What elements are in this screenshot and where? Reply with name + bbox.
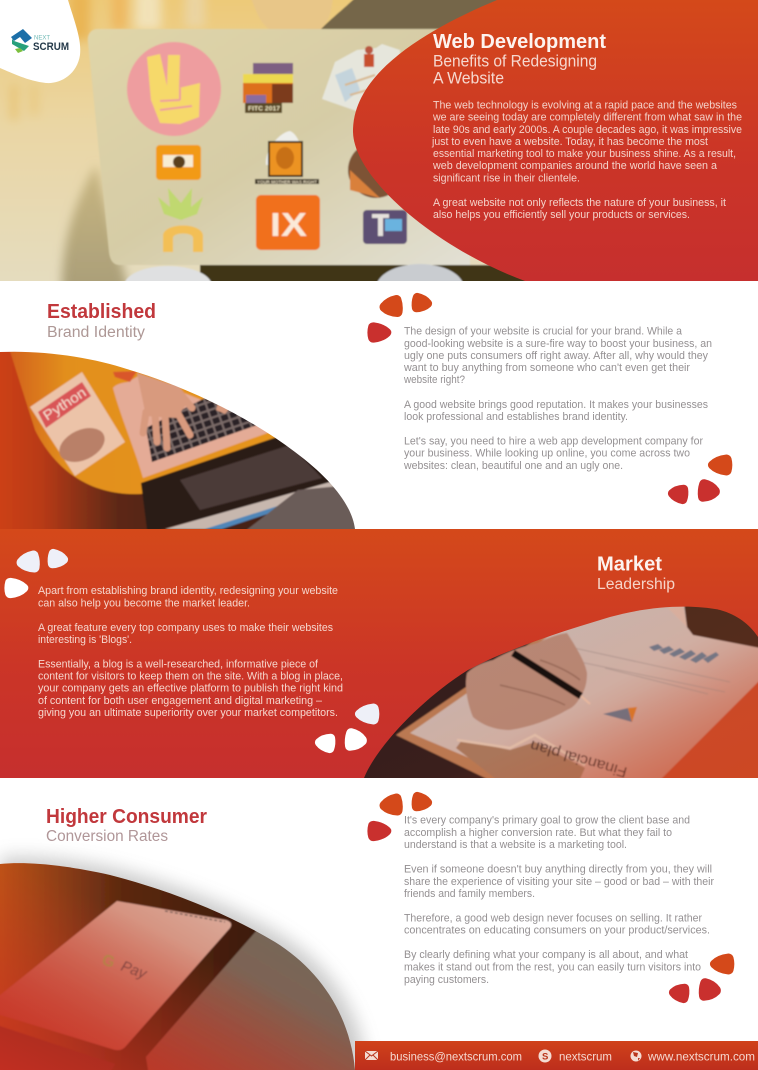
laptop base <box>112 376 269 479</box>
image shadow <box>0 857 366 1070</box>
photo: typing on a laptop <box>0 352 355 529</box>
text block: brand identity: website right? <box>403 374 465 386</box>
text block: hero intro: essential marketing tool to make your business shine. As a result, <box>433 148 736 160</box>
icon: petals bottom <box>672 459 727 500</box>
text block: brand identity: Let's say, you need to hire a web app development company for <box>404 436 703 448</box>
hand holding pen <box>466 633 587 730</box>
heading: market leadership <box>597 554 675 593</box>
text block: conversion rates: Therefore, a good web design never focuses on selling. It rather <box>404 912 702 924</box>
hero photo: person with laptop <box>0 0 525 281</box>
text block: brand identity: good-looking website is a sure-fire way to boost your business, an <box>404 338 712 350</box>
text block: conversion rates: By clearly defining what your company is all about, and what <box>404 949 688 961</box>
text block: market leadership: your company gets an effective platform to publish the right kind <box>38 682 343 694</box>
text block: brand identity: A good website brings good reputation. It makes your businesses <box>404 399 709 411</box>
pie chart <box>603 707 637 722</box>
book: Python <box>30 372 125 476</box>
text block: conversion rates: It's every company's primary goal to grow the client base and <box>404 814 690 826</box>
heading: web development: Benefits of Redesigning <box>433 52 597 70</box>
text block: hero intro: web development companies around the world have seen a <box>432 160 718 172</box>
text block: brand identity: The design of your website is crucial for your brand. While a <box>404 326 683 338</box>
text block: market leadership: Apart from establishing brand identity, redesigning your website <box>38 585 338 597</box>
laptop lid <box>88 29 470 265</box>
text block: market leadership: of content for both user engagement and digital marketing – <box>38 695 323 707</box>
phone back panel <box>146 931 355 1070</box>
text block: brand identity: look professional and establishes brand identity. <box>404 411 628 423</box>
heading: web development <box>433 31 606 88</box>
text block: brand identity: ugly one puts consumers off right away. After all, why would they <box>404 350 709 362</box>
sticker: camera <box>156 145 201 180</box>
heading: established: Established <box>47 301 156 323</box>
text block: conversion rates: understand is that a website is a marketing tool. <box>404 839 627 851</box>
laptop screen <box>141 435 335 530</box>
icon: skype <box>538 1050 552 1062</box>
heading: higher consumer: Conversion Rates <box>46 828 168 845</box>
text block: conversion rates: share the experience of visiting your site – good or bad – with their <box>404 876 714 888</box>
book: Python: Python <box>40 384 89 424</box>
icon: petals bottom <box>673 958 729 999</box>
sticker: pineapple <box>158 188 203 252</box>
text block: market leadership: giving you an ultimate superiority over your market competitors. <box>38 707 338 719</box>
logo badge: SCRUM <box>33 41 69 53</box>
text block: conversion rates: makes it stand out from the rest, you can easily turn visitors into <box>404 962 701 974</box>
heading: market leadership: Market <box>597 554 662 576</box>
text block: hero intro: The web technology is evolving at a rapid pace and the websites <box>433 100 738 112</box>
sticker: obey face <box>255 131 319 184</box>
panel: hero <box>0 0 758 312</box>
photo: phone showing G Pay <box>0 863 355 1070</box>
text block: conversion rates: paying customers. <box>404 974 489 986</box>
icon: petals top <box>373 297 428 338</box>
keyboard <box>146 398 263 462</box>
text block: conversion rates: accomplish a higher conversion rate. But what they fail to <box>404 827 672 839</box>
text block: brand identity <box>403 326 712 472</box>
photo: hand writing on financial plan: Financial plan <box>528 737 629 780</box>
text block: hero intro: significant rise in their clientele. <box>433 172 580 184</box>
sticker: round portrait <box>347 149 389 199</box>
heading: higher consumer: Higher Consumer <box>46 806 207 828</box>
heading: web development: Web Development <box>433 31 606 53</box>
G Pay logo text: Pay <box>119 958 150 983</box>
icon: logo mark <box>11 29 32 53</box>
icon: email <box>365 1051 378 1060</box>
text block: hero intro: also helps you efficiently sell your products or services. <box>433 209 690 221</box>
text block: hero intro: late 90s and early 2000s. A couple decades ago, it was impressive <box>433 124 742 136</box>
bar chart <box>649 644 719 663</box>
heading: market leadership: Leadership <box>597 576 675 593</box>
text block: brand identity: websites: clean, beautiful one and an ugly one. <box>403 460 623 472</box>
text block: market leadership: A great feature every top company uses to make their websites <box>38 622 334 634</box>
panel: higher consumer conversion rates <box>0 796 729 1070</box>
phone screen <box>0 901 231 1050</box>
heading: web development: A Website <box>433 70 504 88</box>
footer: contact bar <box>355 1041 758 1070</box>
text block: conversion rates <box>404 814 714 986</box>
text block: brand identity: your business. While looking up online, you come across two <box>404 448 690 460</box>
text block: conversion rates: concentrates on educating consumers on your product/services. <box>404 924 710 936</box>
icon: petals top <box>373 796 428 837</box>
heading: established: Brand Identity <box>47 324 145 341</box>
text block: conversion rates: friends and family members. <box>404 888 535 900</box>
photo: hand writing on financial plan <box>364 606 758 778</box>
text block: brand identity: want to buy anything from someone who can't even get their <box>403 362 690 374</box>
text block: market leadership <box>38 585 343 719</box>
sticker: peace hand <box>127 42 221 136</box>
icon: petals bottom, white <box>319 708 374 749</box>
text block: conversion rates: Even if someone doesn't buy anything directly from you, they will <box>404 864 712 876</box>
sticker: IX <box>256 195 320 250</box>
icon: globe <box>630 1050 642 1062</box>
icon: skype: S <box>542 1052 548 1062</box>
logo badge <box>0 0 80 83</box>
icon: petals top, white <box>10 553 64 594</box>
logo badge: NEXT <box>34 34 50 42</box>
heading: higher consumer <box>46 806 207 845</box>
text block: market leadership: Essentially, a blog is a well-researched, informative piece of <box>38 658 319 670</box>
clipboard clip <box>456 742 585 778</box>
panel: market leadership <box>0 529 758 790</box>
sticker: FITC 2017 <box>243 63 293 113</box>
red wash over lower left <box>0 907 355 1070</box>
text block: market leadership: interesting is 'Blogs'. <box>38 634 132 646</box>
sticker: obey face: YOUR MOTHER WAS RIGHT <box>257 180 317 184</box>
sticker: IX: IX <box>270 206 307 243</box>
sticker: FITC 2017: FITC 2017 <box>248 106 281 112</box>
sticker: illustrated people <box>322 44 400 115</box>
hand <box>137 373 192 448</box>
text block: market leadership: can also help you become the market leader. <box>38 598 250 610</box>
text block: hero intro <box>431 100 742 221</box>
contact: skype name: nextscrum <box>559 1050 612 1064</box>
contact: email address: business@nextscrum.com <box>390 1050 522 1064</box>
text block: market leadership: content for visitors to keep them on the site. With a blog in place, <box>38 670 343 682</box>
G Pay logo text: G <box>100 952 117 972</box>
text block: hero intro: A great website not only reflects the nature of your business, it <box>433 197 726 209</box>
text block: hero intro: just to even have a website. Today, it has become the most <box>431 136 708 148</box>
section background <box>0 529 758 778</box>
text block: hero intro: we are seeing today are completely different from what saw in the <box>432 112 742 124</box>
red title shape <box>353 0 758 281</box>
panel: established brand identity <box>0 297 727 540</box>
sticker: purple tool <box>363 210 407 244</box>
G Pay logo text <box>102 954 148 980</box>
contact: website: www.nextscrum.com <box>647 1050 755 1064</box>
heading: established <box>47 301 156 341</box>
